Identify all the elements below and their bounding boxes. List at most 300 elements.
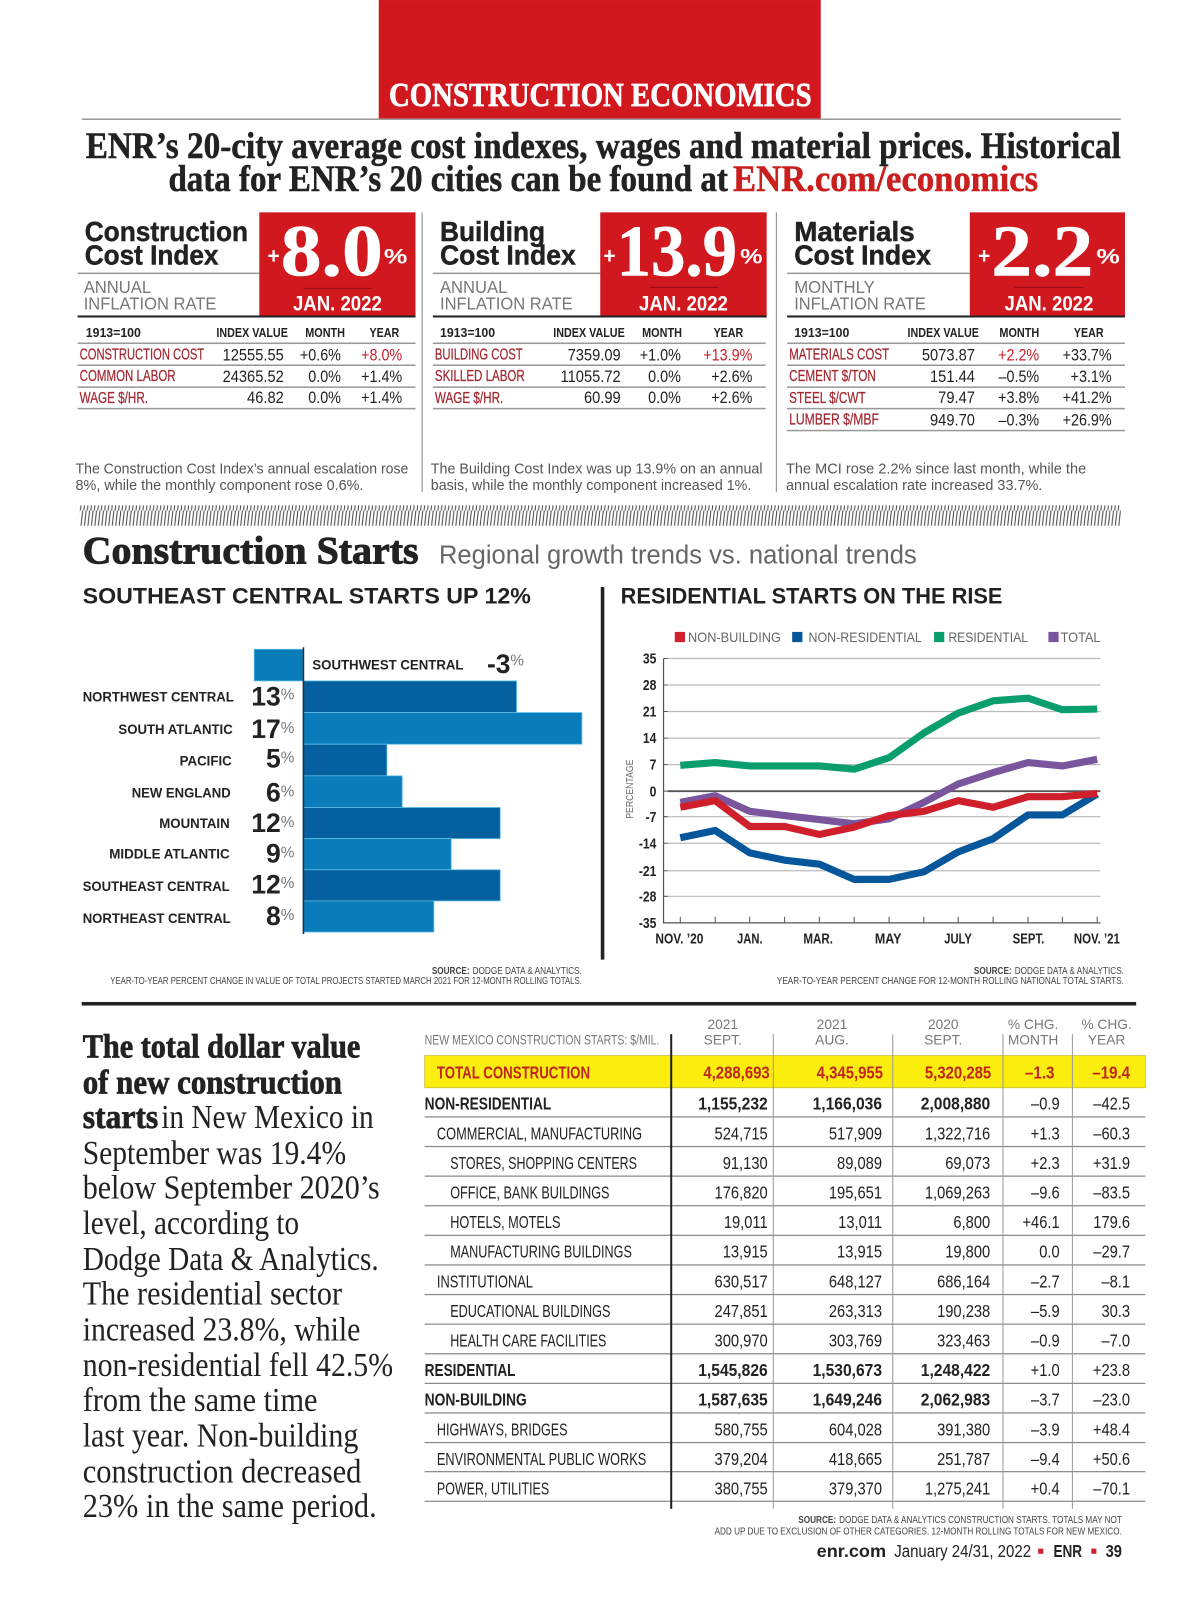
header banner: [379, 0, 821, 119]
row labels: [425, 1094, 646, 1499]
table: materials cost index: +26.9%: [1063, 412, 1112, 430]
bar chart: regional starts: PACIFIC: [180, 754, 232, 769]
column: 2021 sept.: 91,130: [723, 1154, 768, 1173]
heading: building cost index: Cost Index: [440, 239, 576, 270]
callout: +2.2%: %: [1096, 244, 1120, 268]
column: 2020 sept.: 1,322,716: [925, 1124, 990, 1144]
column: 2021 sept.: 176,820: [715, 1183, 768, 1203]
table: materials cost index: CEMENT $/TON: [789, 368, 876, 385]
chart heading: southeast central: SOUTHEAST CENTRAL STARTS UP 12%: [83, 583, 531, 608]
column: % change month: –3.9: [1031, 1420, 1060, 1440]
table: construction cost index: [78, 325, 415, 409]
headline: ENR’s 20-city average cost indexes, wages and material prices. Historical: [86, 125, 1121, 166]
text block: new mexico summary: The total dollar value: [83, 1029, 360, 1066]
column: % change month: –0.9: [1031, 1095, 1060, 1114]
source note: table: SOURCE:: [798, 1515, 836, 1526]
table: construction cost index: +1.4%: [361, 368, 403, 386]
footer: January 24/31, 2022: [894, 1541, 1031, 1561]
column: % change month: +0.4: [1031, 1479, 1060, 1499]
text block: new mexico summary: increased 23.8%, while: [83, 1311, 360, 1348]
y axis labels: 14: [643, 730, 657, 746]
table: building cost index: 11055.72: [561, 368, 621, 386]
table: construction cost index: YEAR: [370, 325, 399, 340]
row labels: STORES, SHOPPING CENTERS: [450, 1153, 637, 1173]
table: construction cost index: COMMON LABOR: [80, 368, 176, 385]
row: total construction: TOTAL CONSTRUCTION: [437, 1063, 590, 1083]
row labels: HEALTH CARE FACILITIES: [450, 1331, 606, 1351]
table: building cost index: YEAR: [714, 325, 744, 340]
bar chart: regional starts: %: [281, 686, 295, 703]
row labels: HOTELS, MOTELS: [450, 1212, 560, 1232]
column: 2020 sept.: 251,787: [937, 1450, 990, 1469]
source note: bar chart: SOURCE:: [432, 966, 470, 977]
series: residential: [680, 698, 1097, 769]
column: 2021 sept.: 247,851: [715, 1302, 768, 1321]
row labels: RESIDENTIAL: [425, 1360, 516, 1380]
column: 2020 sept.: 1,275,241: [925, 1479, 990, 1499]
text block: new mexico summary: starts: [83, 1099, 158, 1136]
column: % change year: –83.5: [1093, 1183, 1130, 1203]
table: construction cost index: 1913=100: [86, 325, 141, 340]
table: materials cost index: STEEL $/CWT: [789, 390, 866, 407]
text block: new mexico summary: September was 19.4%: [83, 1135, 346, 1172]
table: construction cost index: CONSTRUCTION COST: [80, 346, 204, 363]
text block: new mexico summary: construction decreased: [83, 1453, 362, 1490]
table: materials cost index: MATERIALS COST: [789, 346, 889, 363]
column: 2020 sept.: 1,069,263: [925, 1183, 990, 1203]
table: building cost index: SKILLED LABOR: [435, 368, 525, 385]
column: 2020 sept.: 391,380: [937, 1420, 990, 1440]
table header: 2021: [817, 1017, 847, 1032]
table: materials cost index: +41.2%: [1063, 389, 1112, 407]
column: % change year: –8.1: [1101, 1272, 1130, 1292]
bar chart: regional starts: %: [281, 720, 295, 737]
y axis labels: 28: [643, 677, 656, 693]
bar chart: regional starts: 17: [251, 714, 281, 744]
bar chart: regional starts: %: [281, 907, 295, 924]
bar chart: regional starts: SOUTH ATLANTIC: [118, 722, 233, 737]
callout: +13.9%: JAN. 2022: [639, 291, 728, 315]
chart heading: residential starts: RESIDENTIAL STARTS ON THE RISE: [621, 583, 1002, 608]
section heading: construction starts: Regional growth trends vs. national trends: [439, 542, 917, 570]
bar chart: regional starts: %: [510, 653, 524, 670]
table header: YEAR: [1088, 1032, 1125, 1047]
y axis labels: -14: [639, 835, 657, 852]
table: new mexico construction starts: [425, 1017, 1145, 1509]
source note: table: ADD UP DUE TO EXCLUSION OF OTHER CATEGORIES. 12-MONTH ROLLING TOTALS FOR NEW MEXICO.: [715, 1526, 1122, 1537]
row labels: NON-BUILDING: [425, 1390, 527, 1410]
column: 2021 aug.: 303,769: [829, 1331, 882, 1351]
table: building cost index: +2.6%: [711, 368, 753, 386]
bar chart: regional starts: 12: [251, 869, 281, 899]
column: 2021 aug.: 648,127: [829, 1272, 882, 1292]
bar chart: regional starts: NORTHEAST CENTRAL: [83, 911, 231, 926]
text block: new mexico summary: Dodge Data & Analytics.: [83, 1241, 379, 1278]
column: % change year: –70.1: [1093, 1479, 1130, 1499]
heading: construction cost index: Cost Index: [85, 239, 219, 270]
table: construction cost index: MONTH: [305, 325, 345, 340]
bar chart: regional starts: SOUTHEAST CENTRAL: [83, 879, 230, 894]
text block: new mexico summary: below September 2020’s: [83, 1169, 380, 1206]
label: annual inflation rate: [440, 277, 573, 313]
column: % change month: –9.6: [1031, 1183, 1060, 1203]
panel: materials cost index: [786, 211, 1125, 494]
header banner: CONSTRUCTION ECONOMICS: [389, 77, 812, 114]
table: construction cost index: +1.4%: [361, 389, 403, 407]
column: % change month: –5.9: [1031, 1302, 1060, 1321]
row labels: COMMERCIAL, MANUFACTURING: [437, 1123, 642, 1143]
source note: line chart: SOURCE:: [974, 966, 1012, 977]
column: 2021 aug.: 13,915: [837, 1243, 882, 1262]
column: % change year: +50.6: [1093, 1450, 1130, 1469]
column: 2021 aug.: 418,665: [829, 1450, 882, 1469]
source note: table: [715, 1515, 1122, 1537]
row labels: POWER, UTILITIES: [437, 1479, 549, 1499]
table: building cost index: +13.9%: [703, 347, 753, 365]
source note: line chart: [777, 966, 1124, 987]
row: total construction: –1.3: [1025, 1063, 1055, 1083]
y axis labels: -35: [639, 915, 656, 931]
x axis labels: MAY: [875, 931, 902, 947]
callout: +13.9%: %: [740, 244, 763, 268]
section heading: construction starts: [83, 530, 917, 573]
caption: building cost index: The Building Cost Index was up 13.9% on an annual: [431, 462, 763, 478]
y axis labels: -28: [639, 888, 656, 905]
callout: +13.9%: [600, 211, 767, 316]
label: monthly inflation rate: [794, 277, 926, 313]
caption: materials cost index: annual escalation rate increased 33.7%.: [786, 478, 1042, 494]
x axis labels: [655, 931, 1120, 947]
column: 2021 aug.: 379,370: [829, 1479, 882, 1499]
column: 2020 sept.: 1,248,422: [921, 1361, 990, 1380]
table: materials cost index: +3.8%: [998, 389, 1040, 407]
heading: construction cost index: Construction: [85, 216, 248, 247]
caption: building cost index: basis, while the monthly component increased 1%.: [431, 478, 751, 494]
source note: bar chart: [110, 966, 582, 987]
x axis labels: JULY: [944, 931, 972, 947]
bar chart: regional starts: 6: [266, 777, 281, 807]
callout: +13.9%: +: [603, 243, 616, 268]
table: building cost index: +1.0%: [640, 347, 681, 365]
series: total: [680, 759, 1097, 824]
column: % change year: +23.8: [1093, 1361, 1130, 1380]
y axis title: PERCENTAGE: [624, 760, 636, 819]
table: building cost index: INDEX VALUE: [553, 325, 625, 340]
table: construction cost index: +8.0%: [361, 347, 403, 365]
table: materials cost index: INDEX VALUE: [908, 325, 979, 340]
column: 2020 sept.: [921, 1095, 990, 1499]
row labels: OFFICE, BANK BUILDINGS: [450, 1182, 609, 1202]
text block: new mexico summary: last year. Non-building: [83, 1418, 358, 1455]
column: 2020 sept.: 190,238: [937, 1302, 990, 1321]
label: annual inflation rate: INFLATION RATE: [84, 293, 216, 313]
table: materials cost index: –0.3%: [998, 412, 1040, 430]
caption: materials cost index: The MCI rose 2.2% since last month, while the: [786, 462, 1086, 478]
section heading: construction starts: Construction Starts: [83, 530, 419, 573]
column: 2021 sept.: 300,970: [715, 1331, 768, 1351]
legend: NON-RESIDENTIAL: [809, 630, 922, 645]
label: monthly inflation rate: INFLATION RATE: [794, 293, 926, 313]
x axis labels: NOV. ’20: [655, 931, 703, 947]
x axis labels: SEPT.: [1013, 931, 1044, 947]
text block: new mexico summary: in New Mexico in: [161, 1099, 374, 1136]
bar chart: regional starts: NEW ENGLAND: [132, 785, 231, 800]
row labels: NON-RESIDENTIAL: [425, 1094, 552, 1114]
table: building cost index: MONTH: [642, 325, 682, 340]
column: 2021 aug.: [813, 1095, 882, 1499]
panel: building cost index: [431, 211, 767, 494]
table: construction cost index: WAGE $/HR.: [80, 390, 148, 407]
footer: ENR: [1054, 1541, 1082, 1561]
column: % change year: +48.4: [1093, 1420, 1130, 1440]
column: 2021 aug.: 195,651: [829, 1183, 882, 1203]
column: % change year: 179.6: [1093, 1213, 1130, 1232]
callout: +2.2%: +: [978, 243, 990, 268]
table header: % CHG.: [1081, 1017, 1132, 1032]
table: materials cost index: MONTH: [999, 325, 1039, 340]
table: materials cost index: 949.70: [930, 412, 975, 430]
caption: construction cost index: 8%, while the monthly component rose 0.6%.: [76, 478, 363, 494]
table: building cost index: 0.0%: [648, 368, 681, 386]
table: materials cost index: 79.47: [938, 390, 975, 407]
heading: materials cost index: [794, 216, 932, 270]
footer: [817, 1541, 1122, 1561]
table header: 2020: [928, 1017, 959, 1032]
bar chart: regional starts: 13: [251, 681, 281, 711]
x axis labels: NOV. ’21: [1074, 931, 1120, 947]
y axis labels: 0: [650, 783, 656, 800]
table: materials cost index: +33.7%: [1063, 347, 1112, 365]
table: construction cost index: +0.6%: [300, 347, 341, 365]
heading: materials cost index: Cost Index: [794, 239, 932, 270]
callout: +2.2%: [970, 211, 1125, 316]
x axis labels: JAN.: [737, 931, 763, 947]
column: 2021 aug.: 1,166,036: [813, 1095, 882, 1114]
label: annual inflation rate: ANNUAL: [440, 277, 508, 297]
source note: table: DODGE DATA & ANALYTICS CONSTRUCTION STARTS. TOTALS MAY NOT: [839, 1515, 1122, 1526]
table header: 2021: [707, 1017, 738, 1032]
heading: construction cost index: [85, 216, 248, 270]
panel: construction cost index: [76, 211, 415, 494]
heading: building cost index: [440, 216, 576, 270]
heading: materials cost index: Materials: [794, 216, 915, 247]
source note: bar chart: YEAR-TO-YEAR PERCENT CHANGE IN VALUE OF TOTAL PROJECTS STARTED MARCH 2021 FOR 12-MONTH ROLLING TOTALS.: [110, 976, 582, 987]
headline: ENR.com/economics: [733, 158, 1038, 199]
caption: materials cost index: [786, 462, 1086, 494]
series: non-building: [680, 793, 1097, 834]
text block: new mexico summary: from the same time: [83, 1382, 317, 1419]
row: total construction: 4,345,955: [817, 1063, 883, 1083]
source note: line chart: YEAR-TO-YEAR PERCENT CHANGE FOR 12-MONTH ROLLING NATIONAL TOTAL STARTS.: [777, 976, 1124, 987]
column: 2021 sept.: 380,755: [715, 1479, 768, 1499]
column: 2021 sept.: 630,517: [715, 1272, 768, 1292]
bar chart: regional starts: 12: [251, 808, 281, 838]
table: materials cost index: 151.44: [930, 368, 975, 386]
row labels: INSTITUTIONAL: [437, 1271, 533, 1291]
column: 2020 sept.: 2,008,880: [921, 1095, 990, 1114]
callout: +2.2%: JAN. 2022: [1005, 291, 1093, 315]
bar chart: regional starts: %: [281, 845, 295, 862]
row labels: MANUFACTURING BUILDINGS: [450, 1242, 632, 1262]
column: 2020 sept.: 69,073: [945, 1154, 990, 1173]
table: materials cost index: 5073.87: [922, 347, 975, 365]
x axis labels: MAR.: [803, 931, 833, 947]
column: 2020 sept.: 6,800: [953, 1213, 990, 1232]
bar chart: regional starts: NORTHWEST CENTRAL: [83, 689, 234, 704]
series: non-residential: [680, 794, 1097, 879]
table: construction cost index: INDEX VALUE: [216, 325, 288, 340]
source note: line chart: DODGE DATA & ANALYTICS.: [1015, 966, 1124, 977]
headline: [86, 125, 1121, 199]
column: 2021 sept.: 13,915: [723, 1243, 768, 1262]
table: materials cost index: +2.2%: [998, 347, 1040, 365]
caption: construction cost index: [76, 462, 408, 494]
bar chart: regional starts: 9: [266, 839, 281, 869]
callout: +8.0%: +: [267, 243, 280, 268]
legend: [675, 630, 1101, 645]
column: % change month: 0.0: [1039, 1243, 1060, 1262]
line chart: national starts: [624, 651, 1120, 947]
label: annual inflation rate: INFLATION RATE: [440, 293, 573, 313]
column: % change month: [1022, 1095, 1060, 1499]
footer: 39: [1106, 1541, 1122, 1561]
table: materials cost index: YEAR: [1074, 325, 1104, 340]
table header: [425, 1017, 1132, 1047]
bar chart: regional starts: -3: [487, 649, 510, 679]
table: building cost index: 0.0%: [648, 389, 681, 407]
callout: +13.9%: 13.9: [617, 211, 737, 292]
column: 2021 aug.: 517,909: [829, 1124, 882, 1144]
y axis labels: [639, 651, 657, 931]
bar chart: regional starts: MOUNTAIN: [159, 816, 230, 831]
y axis labels: 7: [650, 757, 656, 773]
caption: building cost index: [431, 462, 763, 494]
bar chart: regional starts: %: [281, 783, 295, 800]
column: 2020 sept.: 2,062,983: [921, 1391, 990, 1410]
column: 2021 aug.: 604,028: [829, 1420, 882, 1440]
table: construction cost index: 24365.52: [223, 368, 284, 386]
column: % change year: –42.5: [1093, 1095, 1130, 1114]
label: monthly inflation rate: MONTHLY: [794, 277, 875, 297]
column: % change year: –60.3: [1093, 1124, 1130, 1144]
bar chart: regional starts: [83, 647, 582, 934]
text block: new mexico summary: The residential sector: [83, 1276, 342, 1313]
text block: new mexico summary: of new construction: [83, 1064, 342, 1101]
text block: new mexico summary: level, according to: [83, 1205, 299, 1242]
column: 2021 aug.: 89,089: [837, 1154, 882, 1173]
y axis labels: 35: [643, 651, 656, 667]
source note: bar chart: DODGE DATA & ANALYTICS.: [473, 966, 582, 977]
table: materials cost index: +3.1%: [1071, 368, 1112, 386]
legend: RESIDENTIAL: [948, 630, 1028, 645]
label: annual inflation rate: [84, 277, 216, 313]
table: materials cost index: [787, 325, 1125, 431]
column: 2021 sept.: [698, 1095, 768, 1499]
column: % change month: +1.3: [1031, 1124, 1060, 1144]
footer: enr.com: [817, 1541, 886, 1561]
column: % change month: +2.3: [1031, 1154, 1060, 1173]
row labels: HIGHWAYS, BRIDGES: [437, 1419, 568, 1439]
callout: +8.0%: %: [384, 244, 407, 268]
table: building cost index: 7359.09: [568, 347, 621, 365]
text block: new mexico summary: 23% in the same period.: [83, 1488, 377, 1525]
table header: AUG.: [815, 1032, 849, 1047]
y axis labels: 21: [643, 704, 656, 720]
table: materials cost index: LUMBER $/MBF: [789, 412, 879, 429]
column: 2021 aug.: 263,313: [829, 1302, 882, 1321]
table: construction cost index: 0.0%: [308, 389, 341, 407]
row: total construction: 5,320,285: [925, 1063, 992, 1083]
bar chart: regional starts: %: [281, 814, 295, 831]
column: 2021 sept.: 1,545,826: [698, 1361, 768, 1380]
column: % change month: –2.7: [1031, 1272, 1060, 1292]
table: building cost index: +2.6%: [711, 389, 753, 407]
row: total construction: 4,288,693: [703, 1063, 770, 1083]
column: % change month: +46.1: [1022, 1213, 1060, 1232]
column: 2020 sept.: 686,164: [937, 1272, 990, 1292]
table: construction cost index: 12555.55: [223, 347, 284, 365]
column: 2021 aug.: 13,011: [838, 1213, 882, 1232]
column: 2021 aug.: 1,530,673: [813, 1361, 882, 1380]
highlighted row background: [425, 1056, 1145, 1088]
table: building cost index: 60.99: [584, 390, 621, 407]
column: 2021 sept.: 524,715: [715, 1124, 768, 1144]
column: 2020 sept.: 19,800: [945, 1243, 990, 1262]
row labels: EDUCATIONAL BUILDINGS: [450, 1301, 610, 1321]
callout: +8.0%: JAN. 2022: [293, 291, 382, 315]
y axis labels: -21: [639, 863, 656, 879]
bar chart: regional starts: %: [281, 750, 295, 767]
column: 2021 sept.: 1,587,635: [698, 1391, 768, 1410]
bar chart: regional starts: MIDDLE ATLANTIC: [109, 847, 230, 862]
column: % change year: –29.7: [1093, 1243, 1130, 1262]
table: materials cost index: –0.5%: [998, 368, 1040, 386]
table header: SEPT.: [924, 1032, 962, 1047]
column: 2020 sept.: 323,463: [937, 1331, 990, 1351]
headline: data for ENR’s 20 cities can be found at: [168, 158, 729, 199]
row: total construction: –19.4: [1092, 1063, 1130, 1083]
column: % change month: +1.0: [1031, 1361, 1060, 1380]
column: % change year: +31.9: [1093, 1154, 1130, 1173]
table: building cost index: WAGE $/HR.: [435, 390, 503, 407]
table header: NEW MEXICO CONSTRUCTION STARTS: $/MIL.: [425, 1032, 659, 1047]
callout: +2.2%: 2.2: [991, 211, 1093, 292]
bar chart: regional starts: 5: [266, 744, 281, 774]
legend: NON-BUILDING: [688, 630, 781, 645]
column: % change year: –23.0: [1093, 1391, 1130, 1410]
column: 2021 sept.: 580,755: [715, 1420, 768, 1440]
bar chart: regional starts: SOUTHWEST CENTRAL: [312, 658, 463, 673]
table: materials cost index: 1913=100: [794, 325, 849, 340]
row labels: ENVIRONMENTAL PUBLIC WORKS: [437, 1449, 646, 1469]
row: total construction: [437, 1063, 1130, 1083]
caption: construction cost index: The Construction Cost Index’s annual escalation rose: [76, 462, 408, 478]
text block: new mexico summary: [83, 1029, 393, 1525]
column: 2021 sept.: 19,011: [724, 1213, 768, 1232]
table header: % CHG.: [1008, 1017, 1058, 1032]
column: % change year: [1093, 1095, 1130, 1499]
label: annual inflation rate: ANNUAL: [84, 277, 151, 297]
table header: SEPT.: [704, 1032, 742, 1047]
column: % change year: –7.0: [1101, 1331, 1130, 1351]
table: construction cost index: 46.82: [247, 390, 284, 407]
table: construction cost index: 0.0%: [308, 368, 341, 386]
legend: TOTAL: [1061, 630, 1101, 645]
callout: +8.0%: [259, 211, 415, 316]
table: building cost index: [433, 325, 766, 409]
y axis labels: -7: [646, 809, 656, 825]
table header: MONTH: [1008, 1032, 1058, 1047]
